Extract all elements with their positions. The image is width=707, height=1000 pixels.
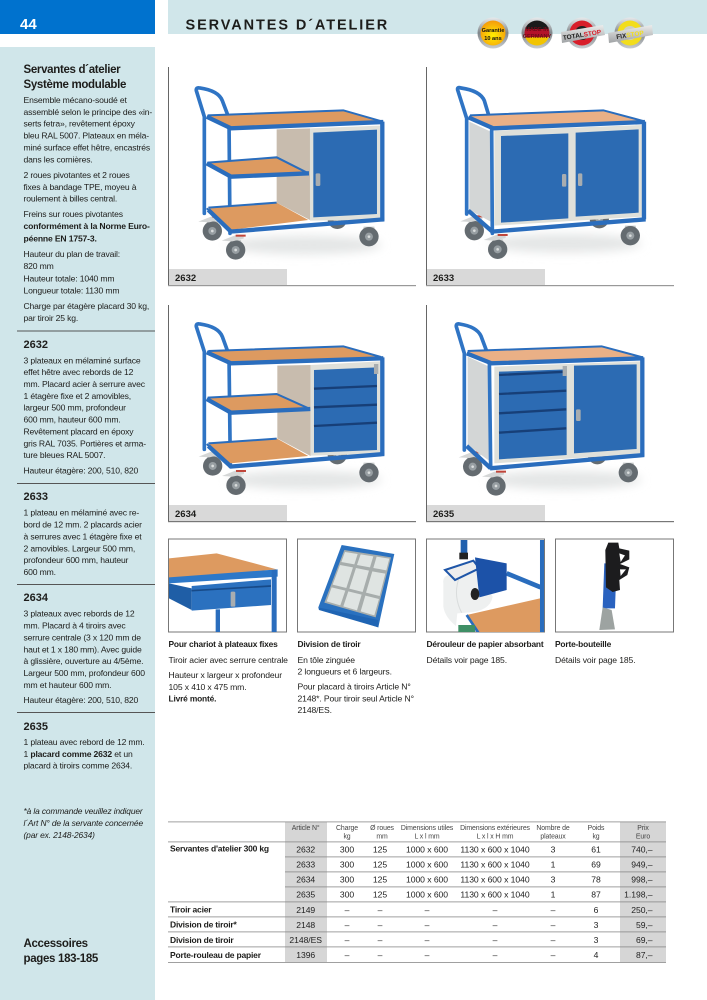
sidebar block 2632: gris RAL 7035. Portières et arma- (24, 438, 146, 448)
table row labels: Division de tiroir (170, 935, 234, 945)
sidebar block 2634: serrure centrale (3 x 120 mm de (24, 632, 141, 642)
table rows: 2635 (296, 890, 315, 900)
table header: Euro (636, 834, 650, 840)
table rows: 1130 x 600 x 1040 (460, 890, 530, 900)
badge: made in germany (522, 18, 552, 48)
table rows: 1000 x 600 (406, 874, 448, 884)
sidebar block 2632: 3 plateaux en mélaminé surface (24, 356, 141, 366)
caption: paper roll holder: Dérouleur de papier absorbant (426, 639, 544, 649)
caption: bottle holder (555, 639, 635, 665)
table rows: – (425, 920, 430, 930)
sidebar block 2633: à serrures avec 1 étagère fixe et (24, 532, 142, 542)
table rows: 125 (373, 860, 387, 870)
table rows: 1000 x 600 (406, 860, 448, 870)
table rows: – (378, 920, 383, 930)
title band: SERVANTES D´ATELIER (186, 18, 389, 34)
label 2635: 2635 (433, 509, 455, 520)
table header: kg (343, 834, 351, 840)
sidebar intro text: conformément à la Norme Euro- (24, 221, 150, 231)
sidebar intro text: Ensemble mécano-soudé et (24, 95, 127, 105)
label 2632: 2632 (175, 273, 196, 284)
sidebar block 2632: largeur 500 mm, profondeur (24, 402, 126, 412)
sidebar block 2634: à glissière, ouverture au 4/5ème. (24, 656, 143, 666)
sidebar intro text: Freins sur roues pivotantes (24, 209, 123, 219)
label 2634 (169, 505, 287, 521)
table rows: 69 (591, 860, 601, 870)
table rows: 300 (340, 874, 354, 884)
table rows: 2148 (296, 920, 315, 930)
sidebar block 2632: ture bleues RAL 5007. (24, 450, 105, 460)
table header: mm (376, 834, 388, 840)
table header: L x l mm (415, 834, 440, 840)
panel: cart 2634 (168, 305, 416, 522)
panel: cart 2635 (426, 305, 674, 522)
table header: Dimensions extérieures (460, 825, 531, 832)
sidebar block 2633: bord de 12 mm. 2 placards acier (24, 520, 142, 530)
sidebar intro text: 2 roues pivotantes et 2 roues (24, 170, 130, 180)
table row labels: Division de tiroir* (170, 920, 237, 930)
table rows: 300 (340, 890, 354, 900)
accessories note (24, 938, 99, 965)
sidebar block 2632: effet hêtre avec rebords de 12 (24, 367, 134, 377)
label 2635 (427, 505, 545, 521)
sidebar intro text: 820 mm (24, 261, 54, 271)
sidebar block 2635 (24, 721, 145, 770)
table rows: 125 (373, 874, 387, 884)
cart illustration 2634 (196, 324, 384, 495)
sidebar heading: Servantes d´atelier (24, 64, 121, 76)
table rows: 125 (373, 890, 387, 900)
sidebar block 2633: 1 plateau en mélaminé avec re- (24, 508, 139, 518)
badge: made in germany: GERMANY (523, 34, 552, 40)
badge: total stop (561, 18, 605, 48)
table header: Poids (588, 825, 605, 832)
table rows: – (493, 950, 498, 960)
table header: Ø roues (370, 825, 395, 832)
table rows: – (378, 935, 383, 945)
caption: drawer divider: 2 longueurs et 6 largeurs. (298, 666, 392, 676)
cart illustration 2633 (458, 88, 646, 259)
badge: guarantee (478, 18, 508, 48)
caption: paper roll holder: Détails voir page 185. (426, 655, 507, 665)
sidebar block 2635: 2635 (24, 721, 48, 733)
label 2633 (427, 269, 545, 285)
table rows: 69,– (636, 935, 653, 945)
table rows: 3 (551, 874, 556, 884)
table rows: 6 (594, 905, 599, 915)
detail image: bottle holder (556, 539, 674, 632)
sidebar block 2634 (24, 592, 145, 705)
table rows: 2634 (296, 874, 315, 884)
sidebar intro text: bleu RAL 5007. Plateaux en méla- (24, 130, 149, 140)
table header: Article N° (292, 824, 320, 832)
table rows: 2149 (296, 905, 315, 915)
table rows: 2632 (296, 844, 315, 854)
table rows: – (378, 950, 383, 960)
sidebar block 2633 (24, 491, 142, 577)
panel: cart 2632 (168, 67, 416, 286)
sidebar intro text (24, 95, 152, 323)
table rows: 300 (340, 860, 354, 870)
table rows: 300 (340, 844, 354, 854)
badge: fix stop: FIXSTOP (616, 30, 645, 41)
table rows: – (493, 935, 498, 945)
caption: drawer divider: Division de tiroir (298, 639, 361, 649)
detail image: drawer divider (298, 539, 416, 632)
caption: bottle holder: Porte-bouteille (555, 639, 612, 649)
detail image: paper roll holder (426, 539, 544, 633)
sidebar intro text: Hauteur totale: 1040 mm (24, 274, 114, 284)
sidebar footnote (24, 806, 144, 840)
badges (478, 18, 653, 48)
sidebar intro text: péenne EN 1757-3. (24, 234, 97, 244)
sidebar intro text: par tiroir 25 kg. (24, 313, 78, 323)
table rows: – (345, 950, 350, 960)
panel: cart 2633 (426, 67, 674, 286)
label 2632 (169, 269, 287, 285)
table rows: – (378, 905, 383, 915)
caption: drawer divider: 2148*. Pour tiroir seul Article N° (298, 694, 414, 704)
caption: steel drawer: Pour chariot à plateaux fixes (168, 639, 278, 649)
sidebar intro text: fixes à bandage TPE, moyeu à (24, 182, 137, 192)
badge: total stop: TOTALSTOP (562, 29, 602, 42)
badge: guarantee: Garantie (482, 28, 504, 34)
sidebar intro text: Hauteur du plan de travail: (24, 249, 120, 259)
page number tab (0, 0, 155, 34)
table rows: 87,– (636, 950, 653, 960)
sidebar block 2633: 2 amovibles. Largeur 500 mm, (24, 544, 135, 554)
table row labels: Servantes d'atelier 300 kg (170, 844, 269, 854)
table rows: 250,– (631, 905, 653, 915)
table rows: – (493, 905, 498, 915)
table header: plateaux (540, 834, 566, 840)
table rows: – (425, 905, 430, 915)
table rows: – (551, 905, 556, 915)
cart illustration 2632 (196, 88, 384, 260)
badge: fix stop (608, 18, 653, 48)
sidebar block 2634: 2634 (24, 592, 49, 604)
sidebar block 2632 (24, 339, 146, 476)
label 2633: 2633 (433, 273, 454, 284)
label 2634: 2634 (175, 509, 197, 520)
table header: kg (592, 834, 600, 840)
table header: L x l x H mm (477, 834, 514, 840)
sidebar block 2635: 1 placard comme 2632 et un (24, 749, 133, 759)
table rows: – (551, 920, 556, 930)
sidebar block 2634: Largeur 500 mm, profondeur 600 (24, 668, 145, 678)
price table (168, 822, 666, 963)
caption: bottle holder: Détails voir page 185. (555, 655, 635, 665)
table row labels: Porte-rouleau de papier (170, 950, 262, 960)
sidebar heading (24, 64, 126, 91)
cart illustration 2635 (456, 324, 644, 496)
table header: Prix (637, 825, 649, 832)
table rows: – (551, 950, 556, 960)
table rows: 1 (551, 860, 556, 870)
sidebar block 2633: 600 mm. (24, 567, 56, 577)
table rows: – (425, 950, 430, 960)
table rows: 949,– (631, 860, 653, 870)
table rows: 3 (594, 935, 599, 945)
sidebar intro text: roulement à billes central. (24, 194, 117, 204)
caption: paper roll holder (426, 639, 544, 665)
table rows: 78 (591, 874, 601, 884)
page number tab: 44 (20, 16, 37, 33)
sidebar intro text: miné surface effet hêtre, encastrés (24, 142, 150, 152)
badge: made in germany: MADE IN (525, 27, 549, 33)
table rows: 1 (551, 890, 556, 900)
accessories note: pages 183-185 (24, 953, 99, 965)
table rows: – (493, 920, 498, 930)
sidebar block 2634: haut et 1 x 180 mm). Avec guide (24, 644, 142, 654)
sidebar block 2634: mm et hauteur 600 mm. (24, 680, 111, 690)
sidebar intro text: Longueur totale: 1130 mm (24, 286, 119, 296)
title band (168, 0, 707, 34)
caption: steel drawer: 105 x 410 x 475 mm. (168, 682, 246, 692)
sidebar footnote: l´Art N° de la servante concernée (24, 818, 143, 828)
table rows: 1130 x 600 x 1040 (460, 874, 530, 884)
table rows: 59,– (636, 920, 653, 930)
accessories note: Accessoires (24, 938, 88, 950)
table rows: 87 (591, 890, 601, 900)
table rows: 1000 x 600 (406, 844, 448, 854)
caption: steel drawer: Tiroir acier avec serrure centrale (168, 655, 288, 665)
table header (292, 824, 650, 840)
table rows: – (345, 920, 350, 930)
sidebar block 2632: 2632 (24, 339, 48, 351)
caption: steel drawer: Hauteur x largeur x profondeur (168, 670, 282, 680)
table header: Charge (336, 825, 358, 832)
sidebar block 2633: profondeur 600 mm, hauteur (24, 555, 129, 565)
sidebar block 2634: 3 plateaux avec rebords de 12 (24, 608, 135, 618)
sidebar block 2633: 2633 (24, 491, 48, 503)
table rows (289, 844, 653, 960)
table row labels: Tiroir acier (170, 904, 212, 914)
table rows: 4 (594, 950, 599, 960)
caption: drawer divider: 2148/ES. (298, 705, 332, 715)
table rows: 125 (373, 844, 387, 854)
table rows: 1130 x 600 x 1040 (460, 844, 530, 854)
sidebar block 2635: 1 plateau avec rebord de 12 mm. (24, 737, 145, 747)
sidebar block 2632: 1 étagère fixe et 2 amovibles, (24, 391, 131, 401)
sidebar background (0, 47, 155, 1000)
table header: Dimensions utiles (401, 825, 454, 832)
sidebar heading: Système modulable (24, 79, 126, 91)
sidebar intro text: serts fetra», revêtement époxy (24, 118, 136, 128)
caption: drawer divider (298, 639, 414, 715)
table row labels (170, 844, 269, 960)
sidebar block 2634: mm. Placard à 4 tiroirs avec (24, 620, 126, 630)
table rows: 2148/ES (289, 935, 322, 945)
detail image: steel drawer (168, 539, 286, 633)
sidebar block 2634: Hauteur étagère: 200, 510, 820 (24, 695, 139, 705)
sidebar footnote: (par ex. 2148-2634) (24, 830, 95, 840)
table rows: 1000 x 600 (406, 890, 448, 900)
caption: drawer divider: En tôle zinguée (298, 655, 355, 665)
sidebar block 2635: placard à tiroirs comme 2634. (24, 760, 132, 770)
table rows: 2633 (296, 860, 315, 870)
badge: guarantee: 10 ans (484, 36, 502, 42)
sidebar footnote: *à la commande veuillez indiquer (24, 806, 144, 816)
sidebar block 2632: Hauteur étagère: 200, 510, 820 (24, 466, 139, 476)
table rows: 61 (591, 844, 601, 854)
sidebar intro text: Charge par étagère placard 30 kg, (24, 301, 149, 311)
table rows: 1.198,– (624, 890, 653, 900)
table rows: 3 (551, 844, 556, 854)
sidebar block 2632: mm. Placard acier à serrure avec (24, 379, 146, 389)
table rows: – (425, 935, 430, 945)
sidebar block 2632: Revêtement placard en époxy (24, 426, 134, 436)
caption: steel drawer: Livré monté. (168, 694, 216, 704)
table rows: – (345, 935, 350, 945)
sidebar block 2632: 600 mm, hauteur 600 mm. (24, 414, 121, 424)
table header: Nombre de (536, 825, 570, 832)
table rows: 1396 (296, 950, 315, 960)
table rows: 1130 x 600 x 1040 (460, 860, 530, 870)
sidebar intro text: dans les cornières. (24, 154, 93, 164)
table rows: – (345, 905, 350, 915)
table rows: 3 (594, 920, 599, 930)
caption: drawer divider: Pour placard à tiroirs Article N° (298, 682, 411, 692)
table rows: – (551, 935, 556, 945)
table rows: 998,– (631, 874, 653, 884)
table rows: 740,– (631, 844, 653, 854)
sidebar intro text: assemblé selon le principe des «in- (24, 107, 152, 117)
caption: steel drawer (168, 639, 288, 704)
